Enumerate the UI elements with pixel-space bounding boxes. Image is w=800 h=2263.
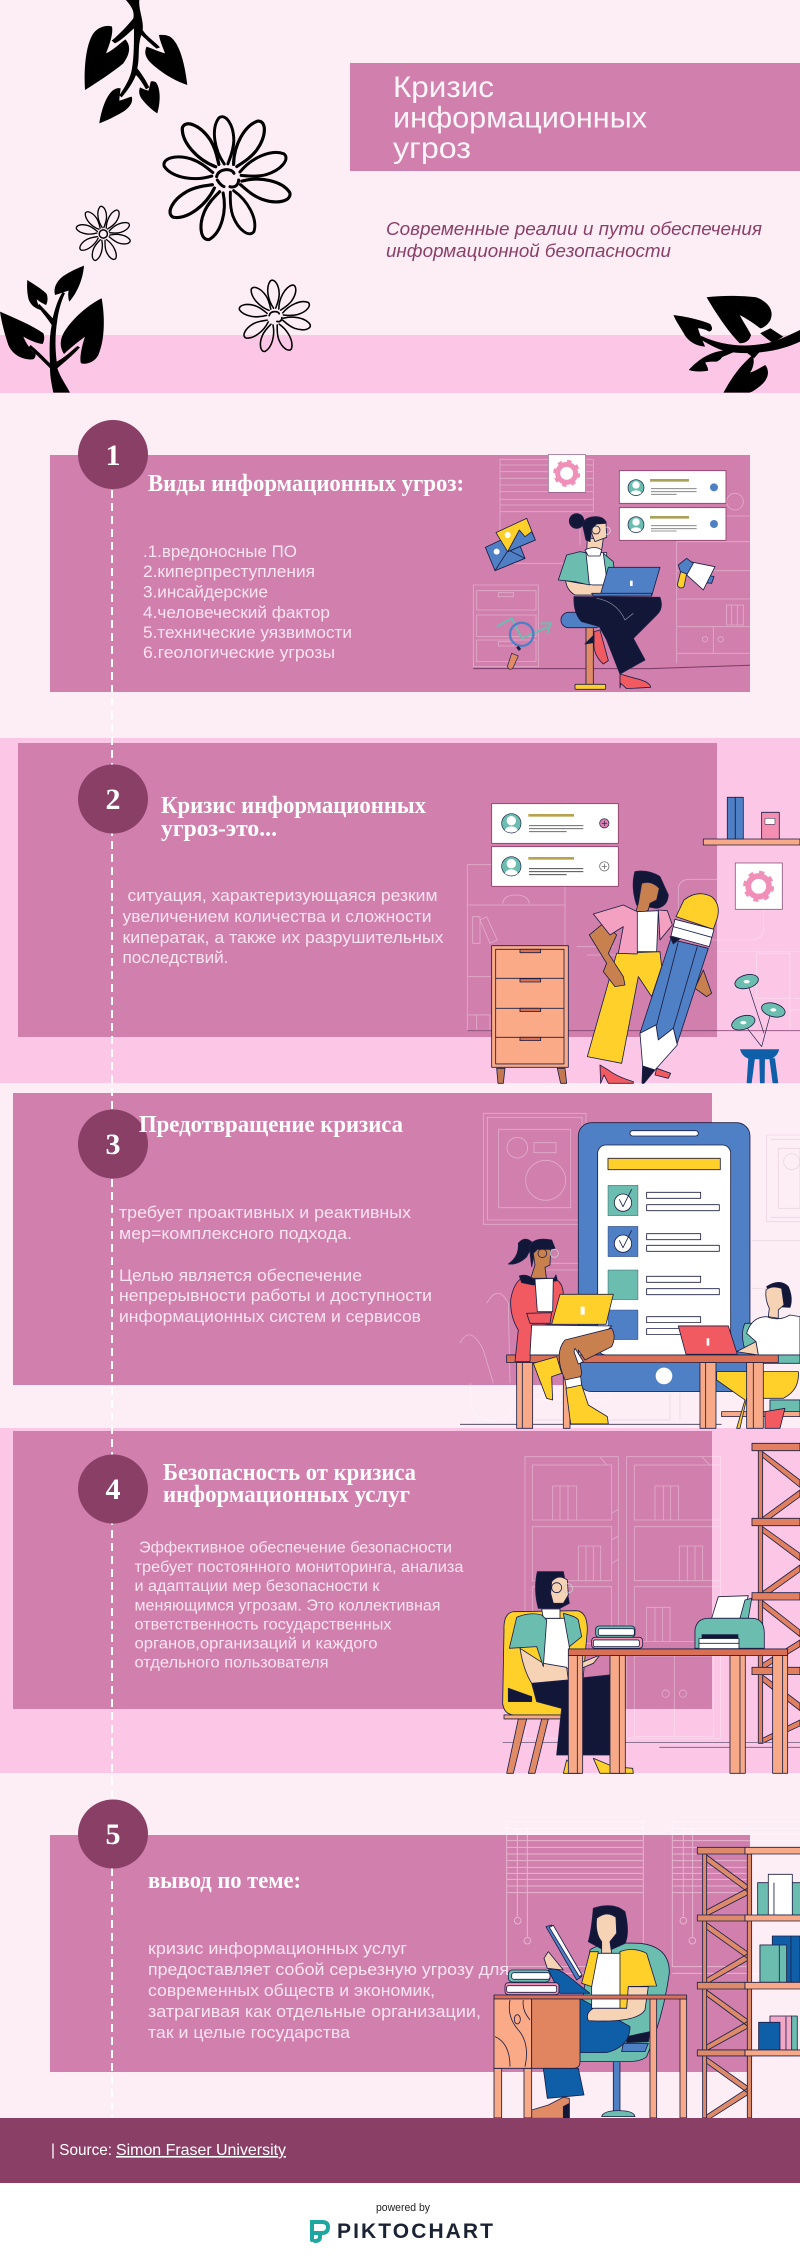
step 5: 5 — [106, 1818, 120, 1851]
woman — [532, 1906, 657, 2118]
text block 5: так и целые государства — [148, 2023, 351, 2042]
step 2 — [78, 764, 148, 834]
scaffold shelf — [752, 1443, 800, 1743]
list of threats: 5.технические уязвимости — [143, 624, 352, 642]
icon: top branch — [85, 0, 187, 123]
footer band with source — [0, 2118, 800, 2183]
text block 4: меняющимся угрозам. Это коллективная — [134, 1598, 440, 1614]
gear card — [735, 863, 782, 909]
text block 2: последствий. — [122, 948, 228, 967]
text block 3: требует проактивных и реактивных — [119, 1203, 412, 1222]
step 1 — [78, 420, 148, 489]
desk — [568, 1649, 788, 1773]
chair — [503, 1611, 593, 1773]
heading 2: угроз-это... — [161, 816, 277, 842]
icon: large flower — [162, 116, 292, 242]
profile card 2 — [492, 847, 618, 886]
pencil — [640, 894, 718, 1083]
woman — [587, 871, 712, 1083]
table and woman on the right — [507, 1282, 800, 1428]
illustration: two women at table with big phone — [460, 1113, 800, 1428]
icon: top right branch — [673, 296, 800, 393]
title block: Кризис — [393, 71, 494, 104]
shelf with books — [703, 797, 800, 845]
books — [505, 1970, 559, 1995]
heading 2 — [161, 793, 426, 842]
icon: megaphone — [677, 558, 715, 590]
phone — [578, 1123, 750, 1392]
printer — [695, 1596, 764, 1649]
panel 1 — [50, 455, 750, 692]
text block 2: ситуация, характеризующаяся резким — [128, 886, 438, 905]
floor lines — [503, 1743, 800, 1747]
step 5 — [78, 1800, 148, 1868]
floor line — [473, 665, 750, 669]
title block — [350, 63, 800, 171]
gear card — [548, 455, 586, 492]
header band — [0, 335, 800, 393]
text block 4: и адаптации мер безопасности к — [134, 1578, 380, 1595]
text block 3: информационных систем и сервисов — [119, 1307, 421, 1326]
illustration: woman with laptop on stool — [473, 455, 750, 689]
icon: bottom left branch — [0, 266, 104, 393]
dresser — [492, 946, 568, 1083]
profile card 1 — [619, 471, 726, 503]
subtitle: Современные реалии и пути обеспечения — [386, 219, 762, 239]
floor line — [467, 1029, 800, 1032]
text block 4: отдельного пользователя — [134, 1654, 328, 1672]
powered by label: powered by — [376, 2202, 430, 2214]
profile card 1 — [492, 804, 618, 843]
text block 3 — [119, 1203, 432, 1326]
piktochart logo: PIKTOCHART — [337, 2220, 493, 2243]
heading 5: вывод по теме: — [148, 1868, 301, 1894]
step 1: 1 — [106, 439, 120, 472]
section band 2 — [0, 738, 800, 1083]
books — [592, 1626, 643, 1648]
desk — [494, 1995, 687, 2118]
text block 3: Целью является обеспечение — [119, 1266, 362, 1285]
heading 3: Предотвращение кризиса — [139, 1112, 403, 1138]
timeline dashed line — [111, 490, 113, 2118]
text block 4 — [134, 1540, 464, 1672]
heading 4: Безопасность от кризиса — [163, 1460, 416, 1486]
list of threats: .1.вредоносные ПО — [143, 543, 297, 561]
text block 4: требует постоянного мониторинга, анализа — [134, 1559, 464, 1576]
white strip — [0, 2183, 800, 2263]
heading 4: информационных услуг — [163, 1482, 410, 1508]
heading 4 — [163, 1460, 416, 1508]
text block 5: предоставляет собой серьезную угрозу для — [148, 1960, 509, 1979]
text block 4: ответственность государственных — [134, 1616, 392, 1634]
woman on the left — [508, 1239, 614, 1424]
step 3: 3 — [106, 1128, 120, 1161]
bookshelf — [697, 1847, 800, 2118]
illustration: woman with pencil — [467, 797, 800, 1083]
list of threats — [143, 543, 352, 662]
floor line — [460, 1423, 722, 1426]
step 3 — [78, 1110, 148, 1178]
heading 1: Виды информационных угроз: — [148, 471, 464, 497]
panel 2 — [18, 743, 717, 1037]
icon: medium flower — [238, 280, 312, 353]
chair — [580, 1943, 669, 2117]
subtitle — [386, 219, 762, 261]
text block 5: современных обществ и экономик, — [148, 1981, 435, 2000]
illustration: woman reading at desk with bookshelf — [494, 1822, 800, 2118]
text block 5: затрагивая как отдельные организации, — [148, 2002, 481, 2021]
footer band with source: | Source: — [51, 2142, 112, 2159]
text block 2: увеличением количества и сложности — [122, 907, 432, 926]
icon: photos — [485, 518, 535, 571]
woman — [509, 1572, 633, 1773]
panel 3 — [13, 1093, 712, 1385]
text block 2: киператак, а также их разрушительных — [122, 928, 444, 947]
icon: small flower — [75, 206, 131, 262]
text block 2 — [122, 886, 444, 967]
footer band with source: Simon Fraser University — [116, 2142, 286, 2159]
list of threats: 4.человеческий фактор — [143, 604, 330, 622]
list of threats: 6.геологические угрозы — [143, 644, 335, 662]
list of threats: 2.киперпреступления — [143, 563, 315, 581]
text block 5: кризис информационных услуг — [148, 1939, 407, 1958]
heading 2: Кризис информационных — [161, 793, 426, 819]
plant on stool — [730, 972, 787, 1083]
text block 5 — [148, 1939, 509, 2042]
title block: угроз — [393, 132, 471, 165]
step 4: 4 — [106, 1473, 120, 1506]
woman — [558, 514, 661, 689]
text block 4: органов,организаций и каждого — [134, 1636, 378, 1652]
text block 3: непрерывности работы и доступности — [119, 1286, 432, 1305]
section band 4 — [0, 1428, 800, 1773]
title block: информационных — [393, 102, 647, 134]
step 2: 2 — [106, 783, 120, 816]
panel 5 — [50, 1835, 750, 2072]
icon: magnifier and arrow — [497, 618, 551, 669]
profile card 2 — [619, 508, 726, 540]
stool — [561, 612, 606, 689]
list of threats: 3.инсайдерские — [143, 584, 268, 602]
step 4 — [78, 1454, 148, 1524]
text block 3: мер=комплексного подхода. — [119, 1224, 352, 1243]
illustration: woman at desk with printer — [503, 1443, 800, 1773]
subtitle: информационной безопасности — [386, 241, 671, 261]
panel 4 — [13, 1431, 712, 1709]
text block 4: Эффективное обеспечение безопасности — [139, 1540, 452, 1556]
